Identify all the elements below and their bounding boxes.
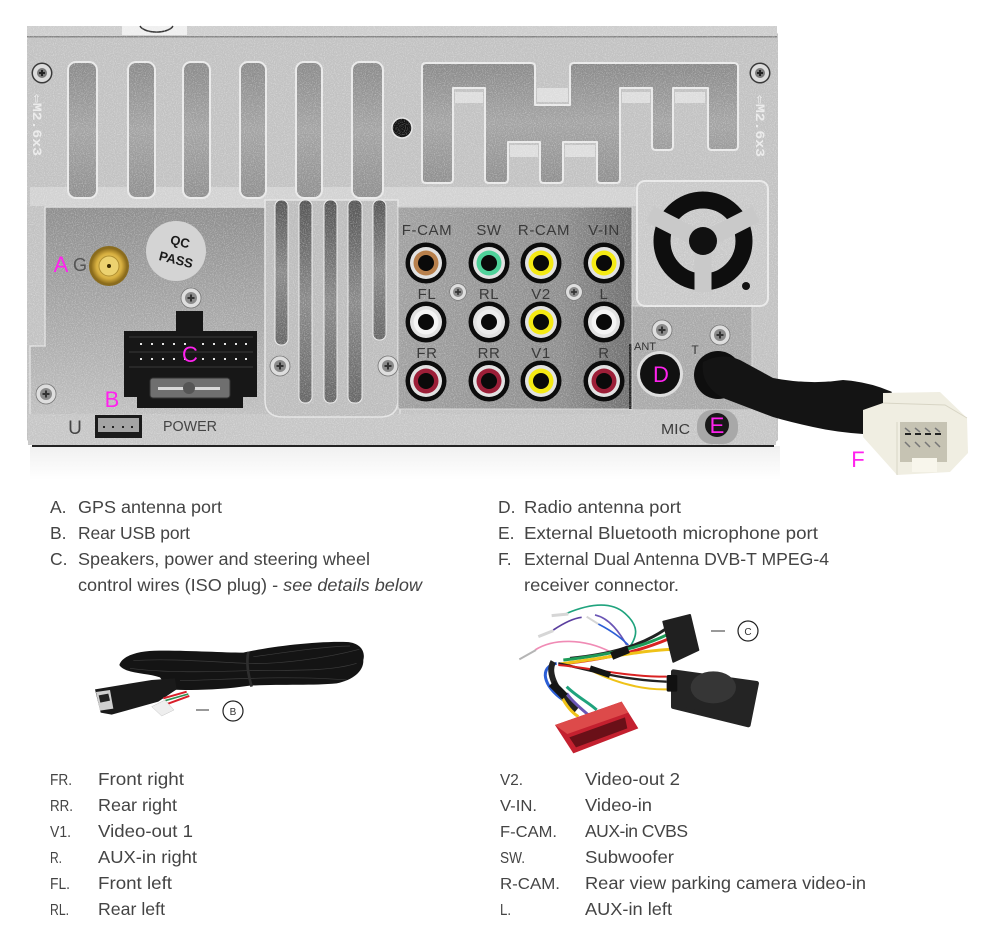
lower right chassis strip	[630, 410, 776, 445]
DVB-T white connector	[863, 392, 968, 475]
legend D to F: receiver connector.	[524, 575, 679, 595]
RCA port labels: RR	[478, 345, 500, 362]
lower chassis strip	[28, 414, 632, 445]
chassis body	[27, 26, 778, 445]
legend A to C: Speakers, power and steering wheel	[78, 549, 370, 569]
callout letters on photo: D	[653, 362, 669, 387]
USB extension cable photo	[95, 642, 364, 716]
abbreviation list right: R-CAM.	[500, 876, 560, 893]
RCA port labels: FL	[418, 286, 436, 303]
side markings: ⇦M2.6x3	[29, 94, 44, 156]
black ISO plug	[663, 615, 698, 662]
radio antenna port	[637, 351, 683, 397]
abbreviation list left: FR.	[50, 772, 72, 789]
abbreviation list left: RL.	[50, 902, 69, 919]
legend D to F: F.	[498, 549, 512, 569]
RCA port labels: V2	[531, 286, 551, 303]
legend A to C: B.	[50, 523, 67, 543]
abbreviation list right: V2.	[500, 772, 523, 789]
abbreviation list right: Video-in	[585, 795, 652, 815]
side markings	[29, 94, 767, 157]
abbreviation list right: SW.	[500, 850, 525, 867]
rear USB port	[95, 415, 142, 438]
RCA port labels: RL	[479, 286, 499, 303]
top sticker	[122, 26, 187, 35]
abbreviation list left: Front right	[98, 769, 184, 789]
legend D to F: D.	[498, 497, 516, 517]
RCA port labels: R	[598, 345, 610, 362]
RCA panel	[398, 207, 632, 409]
QC pass sticker: QC	[169, 232, 192, 251]
steering control box	[667, 671, 757, 725]
fan panel plate	[637, 181, 768, 306]
legend A to C	[50, 497, 423, 595]
abbreviation list left: Rear right	[98, 795, 177, 815]
RCA port labels: V-IN	[588, 222, 620, 239]
legend A to C: Rear USB port	[78, 523, 190, 543]
POWER label: POWER	[163, 418, 217, 435]
legend A to C: C.	[50, 549, 68, 569]
abbreviation list right: Subwoofer	[585, 847, 674, 867]
legend A to C: GPS antenna port	[78, 497, 222, 517]
RCA jacks	[406, 242, 624, 402]
abbreviation list right	[500, 769, 866, 919]
left connector recess	[30, 207, 400, 417]
red connector	[555, 702, 638, 753]
abbreviation list right: F-CAM.	[500, 824, 557, 841]
RCA port labels: SW	[476, 222, 502, 239]
USB socket	[95, 678, 177, 715]
abbreviation list left: Video-out 1	[98, 821, 193, 841]
four-pin plug with wires	[152, 692, 189, 716]
ISO power plug	[124, 311, 257, 408]
antenna and tuner panel	[632, 306, 752, 410]
callout letters on photo: B	[105, 387, 119, 412]
legend A to C: A.	[50, 497, 67, 517]
abbreviation list left: RR.	[50, 798, 73, 815]
raised vent panel	[265, 200, 398, 417]
RCA port labels	[402, 222, 620, 362]
abbreviation list left: R.	[50, 850, 62, 867]
fan opening	[650, 200, 756, 292]
top edge strip	[27, 26, 777, 37]
screws	[32, 62, 770, 404]
microphone port	[697, 410, 738, 444]
abbreviation list right: V-IN.	[500, 798, 537, 815]
callout letters on photo	[54, 252, 865, 472]
callout letters on photo: F	[851, 447, 865, 472]
abbreviation list right: AUX-in left	[585, 899, 672, 919]
RCA port labels: V1	[531, 345, 551, 362]
MIC label: MIC	[661, 421, 690, 438]
legend D to F: Radio antenna port	[524, 497, 681, 517]
legend A to C: control wires (ISO plug) - see details below	[78, 575, 423, 595]
QC pass sticker	[146, 221, 206, 281]
QC pass sticker: PASS	[158, 248, 195, 271]
mounting hole	[392, 118, 412, 138]
callout letters on photo: C	[182, 342, 198, 367]
RCA port labels: R-CAM	[518, 222, 570, 239]
maze-shaped vent	[422, 63, 738, 183]
legend D to F	[498, 497, 829, 595]
callout C	[711, 621, 758, 641]
abbreviation list left: AUX-in right	[98, 847, 197, 867]
RCA port labels: F-CAM	[402, 222, 452, 239]
legend D to F: External Bluetooth microphone port	[524, 523, 818, 543]
abbreviation list right: Rear view parking camera video-in	[585, 873, 866, 893]
callout B: B	[230, 707, 237, 718]
RCA port labels: L	[600, 286, 608, 303]
legend D to F: External Dual Antenna DVB-T MPEG-4	[524, 549, 829, 569]
callout letters on photo: E	[710, 413, 724, 438]
callout B	[196, 701, 243, 721]
coiled cable	[119, 642, 364, 690]
abbreviation list left	[50, 769, 197, 919]
legend D to F: E.	[498, 523, 515, 543]
abbreviation list left: V1.	[50, 824, 71, 841]
ANT label: ANT	[634, 341, 656, 353]
abbreviation list right: L.	[500, 902, 511, 919]
metal texture	[27, 26, 778, 445]
loose wires	[519, 605, 636, 659]
abbreviation list left: Front left	[98, 873, 172, 893]
abbreviation list left: FL.	[50, 876, 70, 893]
main loom	[545, 628, 672, 717]
abbreviation list right: Video-out 2	[585, 769, 680, 789]
abbreviation list left: Rear left	[98, 899, 165, 919]
wiring harness photo	[519, 605, 757, 753]
callout C: C	[744, 627, 752, 638]
fuse	[150, 378, 230, 398]
head unit chassis	[27, 26, 778, 447]
ventilation slots	[68, 62, 383, 198]
GPS antenna connector	[89, 246, 129, 286]
tuner socket	[694, 351, 742, 399]
side markings: ⇦M2.6x3	[752, 95, 767, 157]
U label: U	[68, 418, 82, 439]
floor reflection	[30, 446, 780, 480]
T label: T	[691, 343, 699, 357]
DVB-T cable	[703, 356, 892, 434]
G port label: G	[73, 255, 87, 275]
abbreviation list right: AUX-in CVBS	[585, 821, 688, 841]
callout letters on photo: A	[54, 252, 69, 277]
RCA port labels: FR	[416, 345, 438, 362]
